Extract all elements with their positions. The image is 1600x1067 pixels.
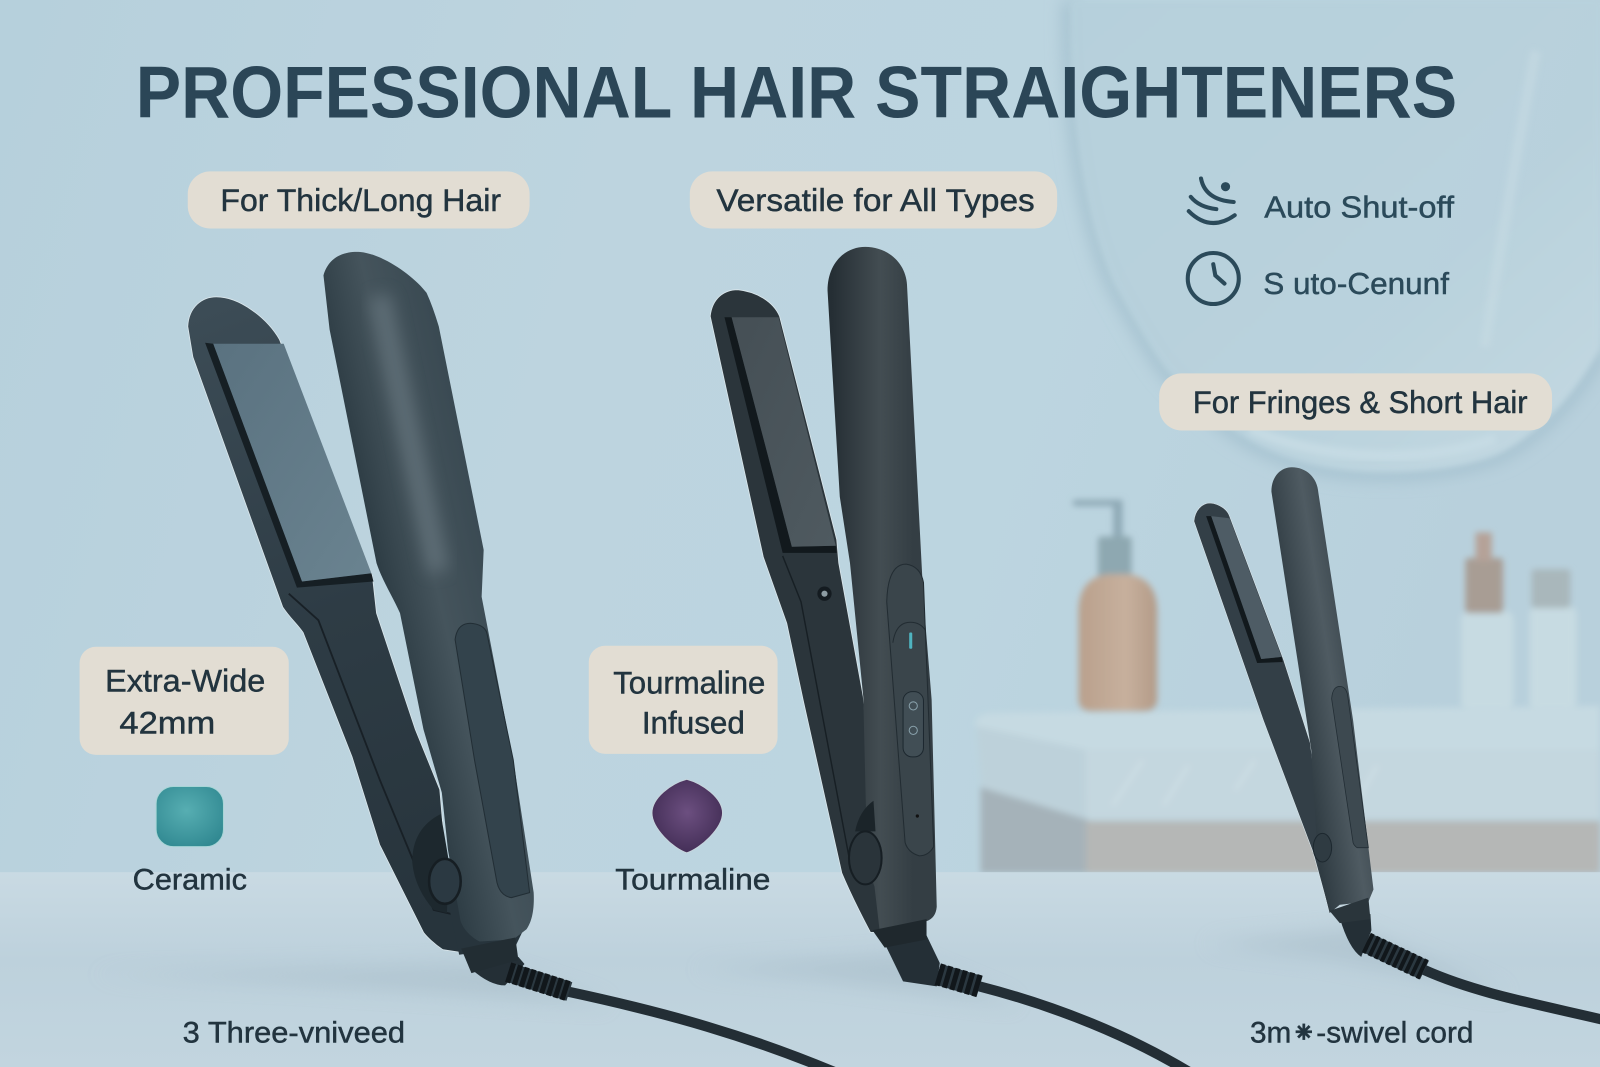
background bottles: [1461, 532, 1577, 711]
back arm: small: [1271, 467, 1373, 913]
hinge: medium: [849, 801, 882, 884]
neck: medium: [872, 919, 927, 948]
pill: for fringes and short hair: For Fringes & Short Hair: [1193, 384, 1528, 420]
back arm: medium: [828, 247, 937, 930]
handle panel: small: [1332, 686, 1368, 848]
pill: versatile for all types: [690, 171, 1057, 228]
box: tourmaline infused: Infused: [642, 704, 745, 740]
box: extra-wide 42mm: 42mm: [119, 704, 215, 740]
caption: right cord: 3m⁕-swivel cord: [1250, 1017, 1473, 1050]
ceramic plate: small: [1206, 516, 1283, 663]
box: extra-wide 42mm: Extra-Wide: [105, 663, 265, 699]
pill: for thick/long hair: [188, 171, 530, 228]
pill: versatile for all types: Versatile for All Types: [716, 182, 1035, 218]
power cord: medium: [885, 935, 1204, 1067]
highlight: large: [380, 296, 439, 571]
label: ceramic: Ceramic: [133, 864, 247, 897]
pill: for thick/long hair: For Thick/Long Hair: [220, 182, 501, 218]
icon: clock: [1188, 253, 1239, 304]
neck: small: [1330, 898, 1370, 923]
counter shadows: [92, 928, 1510, 1005]
oval mirror: [1070, 0, 1600, 472]
pill: for fringes and short hair: [1159, 373, 1552, 430]
icon: ceramic swatch: [156, 786, 223, 847]
ceramic plate: large: [205, 343, 460, 916]
underbody: large: [445, 887, 527, 955]
back arm: large: [323, 252, 534, 942]
power cord: large: [471, 957, 867, 1067]
icon: tourmaline gem: [652, 779, 722, 853]
pivot button: medium: [817, 587, 832, 601]
caption: left cord: 3 Three-vniveed: [183, 1017, 405, 1050]
front arm: medium: [710, 290, 882, 932]
neck: large: [461, 937, 518, 973]
soap bottle: [1072, 500, 1157, 711]
front arm: large: [188, 297, 468, 953]
straightener: large: [188, 252, 867, 1067]
bathroom vanity: [974, 706, 1600, 873]
hinge: small: [1313, 833, 1332, 862]
countertop: [0, 872, 1600, 1067]
text: timer label: S uto-Cenunf: [1263, 267, 1449, 301]
icon: auto shut-off: [1189, 179, 1235, 223]
title: PROFESSIONAL HAIR STRAIGHTENERS: [136, 51, 1457, 133]
box: extra-wide 42mm: [80, 647, 289, 755]
control panel: medium: [887, 564, 934, 856]
straightener: small: [1194, 467, 1600, 1023]
label: tourmaline: Tourmaline: [615, 864, 770, 897]
straightener: medium: [710, 247, 1204, 1067]
box: tourmaline infused: [589, 646, 778, 754]
ceramic plate: medium: [724, 317, 849, 857]
text: auto shut-off: Auto Shut-off: [1264, 190, 1455, 224]
power cord: small: [1340, 914, 1600, 1023]
front arm: small: [1194, 503, 1330, 913]
handle panel: large: [455, 623, 530, 898]
box: tourmaline infused: Tourmaline: [613, 665, 765, 701]
hinge: large: [412, 814, 461, 913]
